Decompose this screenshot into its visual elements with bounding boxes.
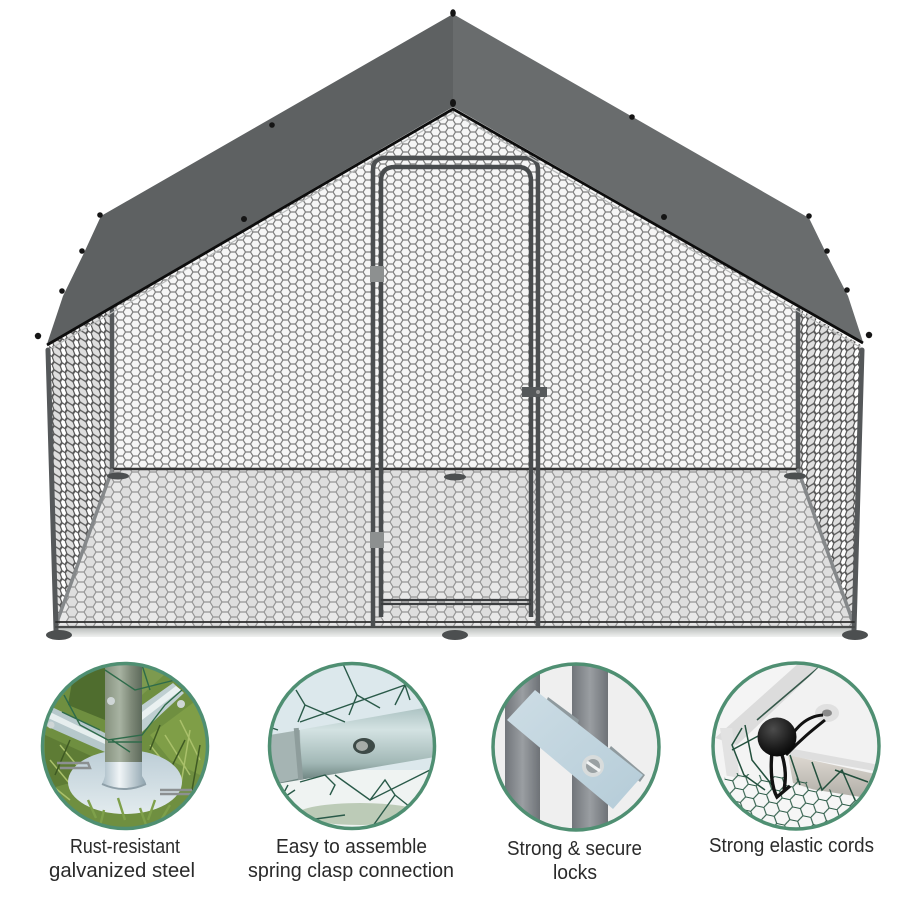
chicken run enclosure	[35, 9, 872, 640]
roof bungee knobs	[35, 9, 872, 339]
door lock	[522, 387, 547, 397]
right side wall mesh	[798, 308, 861, 622]
caption: easy to assemble spring clasp connection: spring clasp connection	[248, 860, 454, 882]
back wall mesh	[112, 108, 798, 470]
caption: strong and secure locks: locks	[553, 862, 597, 884]
ground feet	[46, 472, 868, 640]
caption: easy to assemble spring clasp connection: Easy to assemble	[276, 836, 427, 858]
left side wall mesh	[49, 308, 112, 622]
caption: rust-resistant galvanized steel: Rust-resistant	[70, 836, 180, 858]
detail: elastic cord	[710, 660, 885, 840]
caption: easy to assemble spring clasp connection	[248, 836, 454, 882]
caption: strong elastic cords: Strong elastic cords	[709, 835, 874, 857]
door hinges	[370, 266, 384, 548]
detail: spring clasp connection	[265, 660, 440, 840]
caption: strong and secure locks: Strong & secure	[507, 838, 642, 860]
detail: galvanized steel base	[40, 660, 210, 830]
detail: door lock plate	[490, 660, 665, 835]
roof cover	[47, 14, 863, 349]
caption: rust-resistant galvanized steel	[49, 836, 195, 882]
steel frame	[48, 310, 862, 630]
floor mesh	[52, 470, 856, 637]
caption: strong and secure locks	[507, 838, 642, 884]
caption: rust-resistant galvanized steel: galvanized steel	[49, 860, 195, 882]
door	[373, 158, 538, 626]
